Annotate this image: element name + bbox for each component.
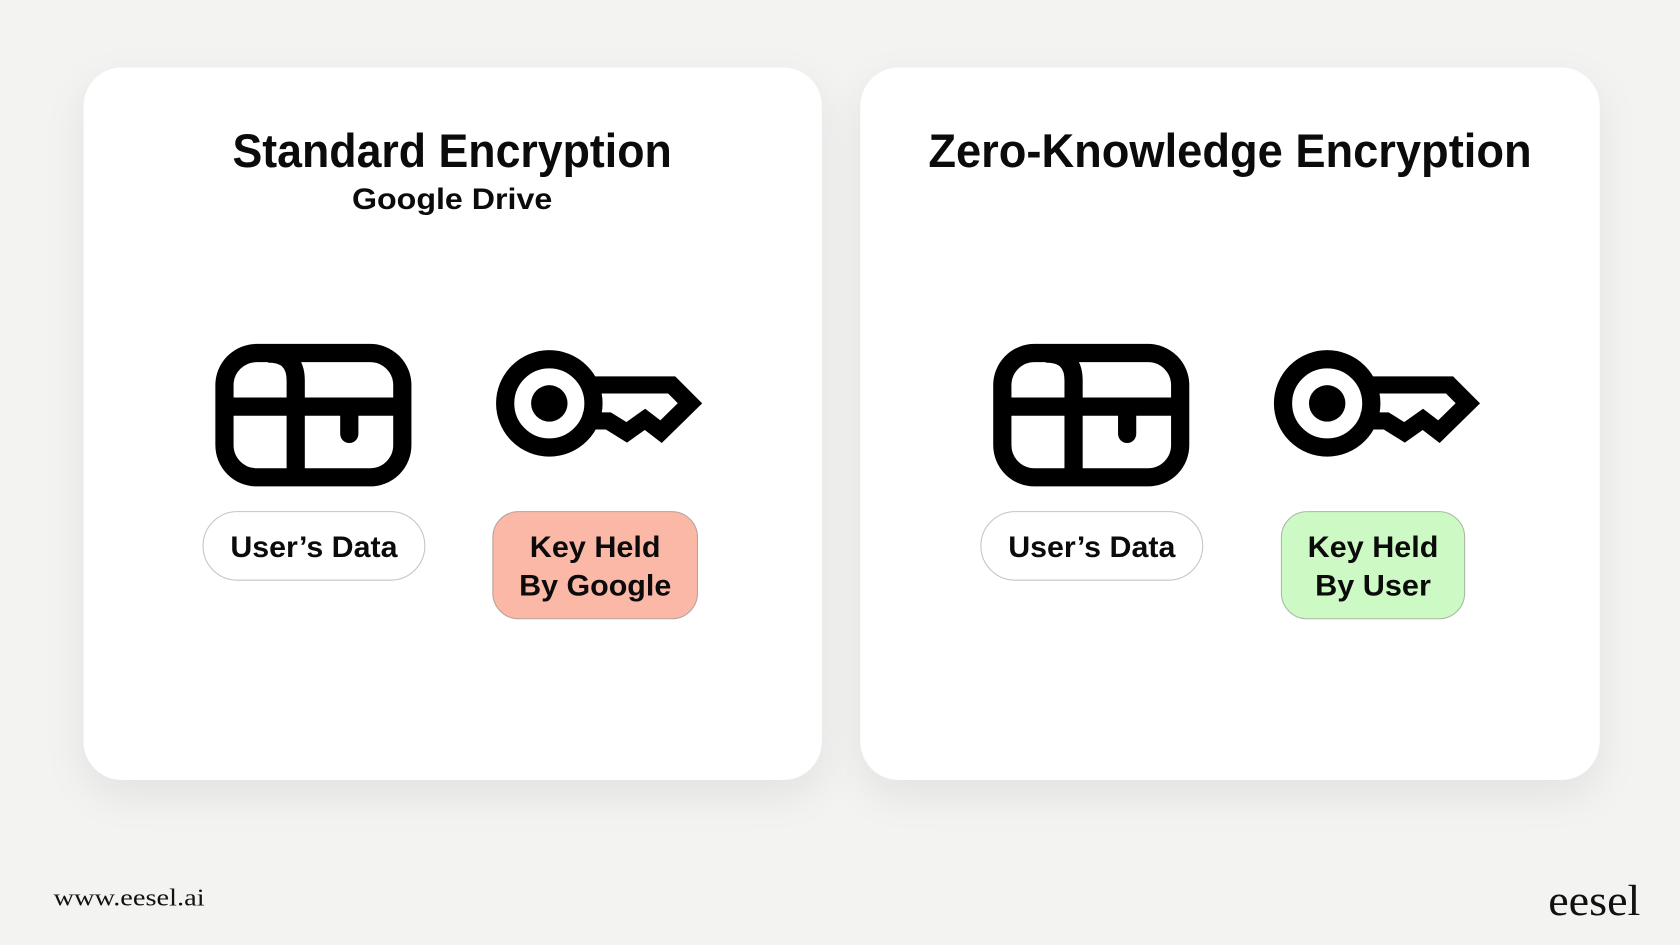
label: key held by user xyxy=(1281,512,1465,619)
label: key held by google: By Google xyxy=(519,570,671,603)
label: key held by google xyxy=(493,512,698,619)
heading: standard encryption: Standard Encryption xyxy=(232,124,672,177)
icon: key xyxy=(505,359,690,448)
label: user's data: User’s Data xyxy=(1008,531,1176,564)
label: key held by user: Key Held xyxy=(1308,531,1438,564)
heading: zero-knowledge encryption: Zero-Knowledge Encryption xyxy=(928,124,1532,177)
footer: website url: www.eesel.ai xyxy=(54,884,205,911)
footer: eesel logo: eesel xyxy=(1548,878,1640,925)
subheading: google drive: Google Drive xyxy=(352,183,552,216)
label: key held by user: By User xyxy=(1315,570,1431,603)
label: user's data xyxy=(981,512,1203,580)
icon: chest xyxy=(1002,353,1180,478)
label: user's data xyxy=(203,512,425,580)
panel: zero-knowledge encryption xyxy=(860,68,1600,780)
label: key held by google: Key Held xyxy=(530,531,661,564)
label: user's data: User’s Data xyxy=(230,531,398,564)
panel: standard encryption xyxy=(84,68,822,780)
icon: chest xyxy=(224,353,402,478)
icon: key xyxy=(1283,359,1468,448)
